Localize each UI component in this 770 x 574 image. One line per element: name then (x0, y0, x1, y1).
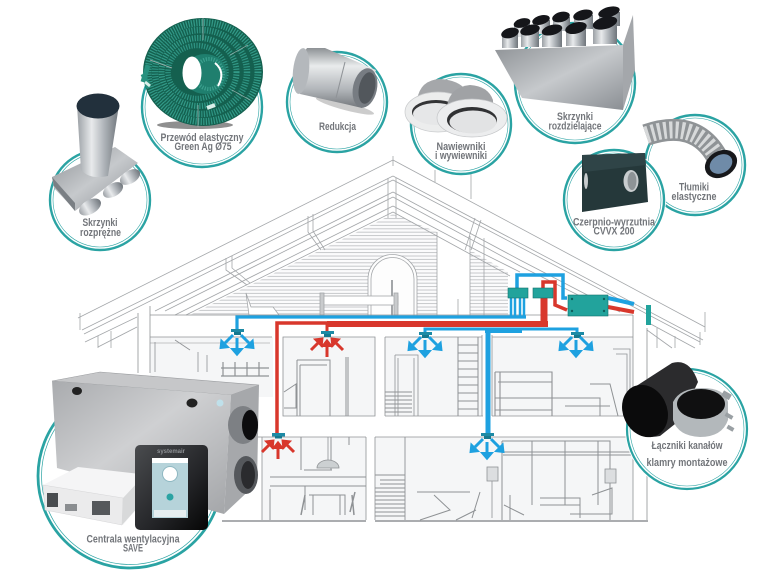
diffuser: red, upper (311, 331, 343, 357)
label: Redukcja (319, 121, 357, 133)
icon: touch control panel (135, 445, 208, 530)
label (548, 111, 602, 132)
panel: centrala wentylacyjna (38, 372, 259, 568)
panel: przewod elastyczny (142, 18, 263, 167)
panel: nawiewniki i wywiewniki (405, 74, 511, 174)
icon: two round diffusers (405, 79, 507, 137)
label: CVVX 200 (594, 226, 634, 238)
icon: flexible silencer (646, 130, 742, 184)
label: Łączniki kanałów (652, 440, 723, 452)
ring (564, 150, 664, 250)
air duct system (237, 275, 634, 433)
roof left slope (78, 160, 393, 348)
label: Nawiewniki (436, 141, 486, 153)
label: rozdzielające (548, 120, 602, 132)
icon: plenum box with pipe (52, 94, 143, 219)
upper storey rooms (138, 306, 647, 520)
ring (515, 23, 635, 143)
label: SAVE (123, 542, 143, 554)
diffuser: red, lower (262, 433, 294, 459)
label: Przewód elastyczny (160, 132, 244, 144)
ring (287, 52, 387, 152)
ring (142, 47, 262, 167)
lower storey rooms (222, 437, 648, 521)
icon: white router box (43, 467, 140, 525)
label: rozprężne (80, 227, 121, 239)
label (646, 440, 728, 469)
icon: ventilation unit (52, 372, 259, 514)
ring (411, 74, 511, 174)
label (672, 182, 716, 203)
room backgrounds (150, 337, 633, 520)
label (435, 141, 487, 162)
red extract ducts (277, 282, 634, 433)
icon: green flexible hose coil (143, 18, 263, 129)
label: Centrala wentylacyjna (86, 534, 180, 546)
icon: distribution box (495, 4, 635, 110)
ring (38, 384, 222, 568)
manifolds and duct heat exchanger (508, 288, 651, 325)
icon: wall intake box (582, 153, 648, 212)
blue supply ducts (237, 275, 634, 433)
diffuser: blue, upper right (559, 332, 593, 358)
label (573, 216, 656, 238)
diffuser: blue, lower (470, 433, 504, 460)
panel: tlumiki elastyczne (645, 115, 745, 215)
label: Tłumiki (679, 182, 709, 194)
panel: skrzynki rozdzielajace (495, 4, 635, 143)
label: i wywiewniki (435, 150, 487, 162)
diffuser: blue, upper left (220, 329, 254, 356)
label: Green Ag Ø75 (174, 141, 232, 153)
panel: laczniki kanalow (614, 362, 749, 491)
label: Skrzynki (82, 217, 118, 229)
label (80, 217, 121, 239)
label: elastyczne (672, 191, 716, 203)
panel: czerpnio-wyrzutnia (562, 148, 666, 252)
house line drawing (78, 156, 705, 521)
attic furniture (246, 254, 458, 316)
icon: black connector and metal clamp (614, 362, 734, 445)
label: klamry montażowe (646, 457, 728, 469)
ring (627, 369, 747, 489)
roof right slope (388, 156, 705, 348)
label (86, 534, 180, 554)
ring (645, 115, 745, 215)
diffuser: blue, upper middle (408, 332, 442, 358)
label: Czerpnio-wyrzutnia (573, 216, 656, 228)
label (160, 132, 244, 153)
label: Skrzynki (557, 111, 593, 123)
panel: redukcja (287, 47, 387, 152)
gable siding (188, 214, 508, 316)
ring (50, 150, 150, 250)
icon: duct reducer (291, 47, 381, 118)
icon: touch control panel: systemair (157, 449, 186, 455)
panel: skrzynki rozprezne (50, 94, 150, 250)
